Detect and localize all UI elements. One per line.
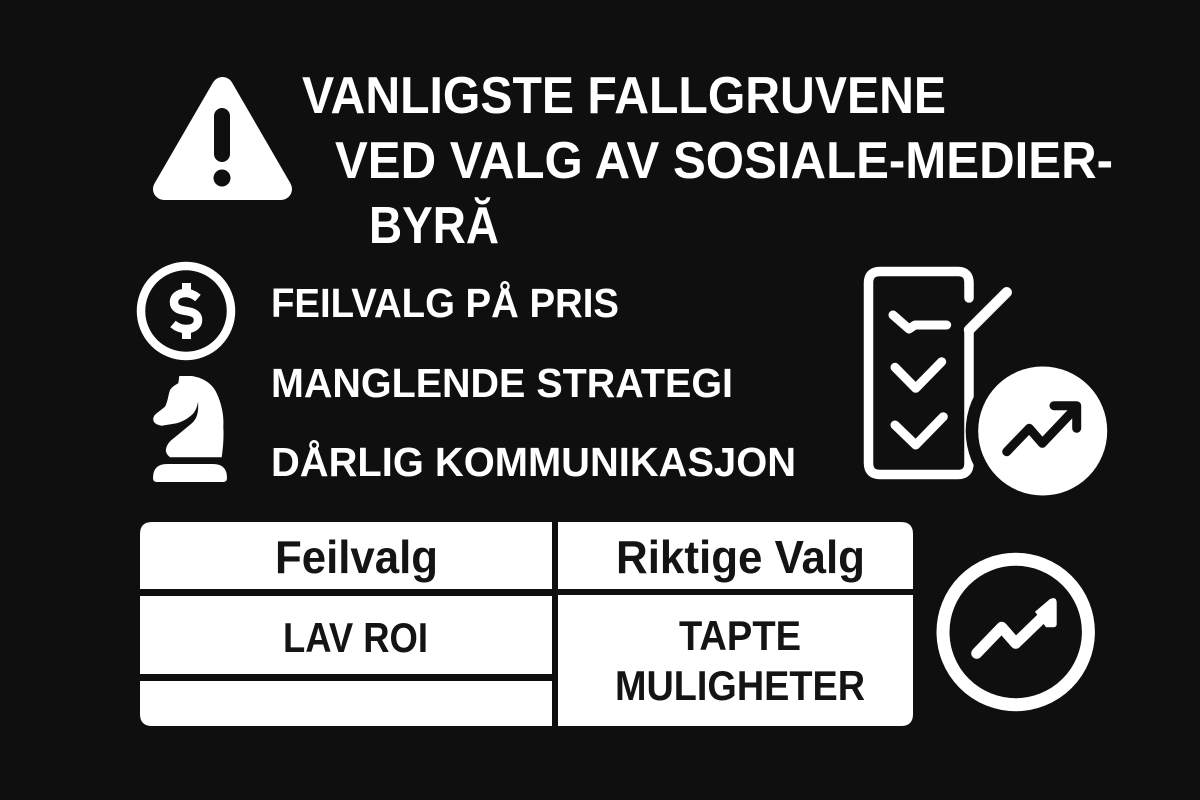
cell: empty (140, 681, 552, 726)
cell: low ROI (140, 596, 552, 674)
cell: lost opportunities: TAPTE (679, 612, 801, 659)
list: pitfalls (271, 280, 796, 485)
list item: communication: DÅRLIG KOMMUNIKASJON (271, 439, 796, 485)
title (302, 67, 1113, 255)
icon: growth badge (966, 354, 1120, 508)
icon: dollar coin (141, 266, 231, 356)
icon: growth ring (943, 559, 1088, 705)
comparison table (140, 522, 913, 726)
title: VANLIGSTE FALLGRUVENE (302, 67, 946, 125)
cell: low ROI: LAV ROI (283, 614, 428, 661)
icon: warning triangle (164, 88, 281, 189)
cell: left header (140, 522, 552, 589)
icon: checklist (868, 272, 1007, 474)
list item: strategy: MANGLENDE STRATEGI (271, 360, 733, 406)
list item: price: FEILVALG PÅ PRIS (271, 280, 619, 326)
icon: chess knight (153, 376, 227, 482)
cell: right header (558, 522, 913, 589)
cell: lost opportunities: MULIGHETER (615, 662, 865, 709)
cell: right header: Riktige Valg (616, 531, 865, 583)
cell: lost opportunities (558, 595, 913, 726)
title: VED VALG AV SOSIALE-MEDIER- (335, 132, 1113, 190)
cell: left header: Feilvalg (275, 531, 438, 583)
title: BYRĂ (369, 197, 499, 255)
